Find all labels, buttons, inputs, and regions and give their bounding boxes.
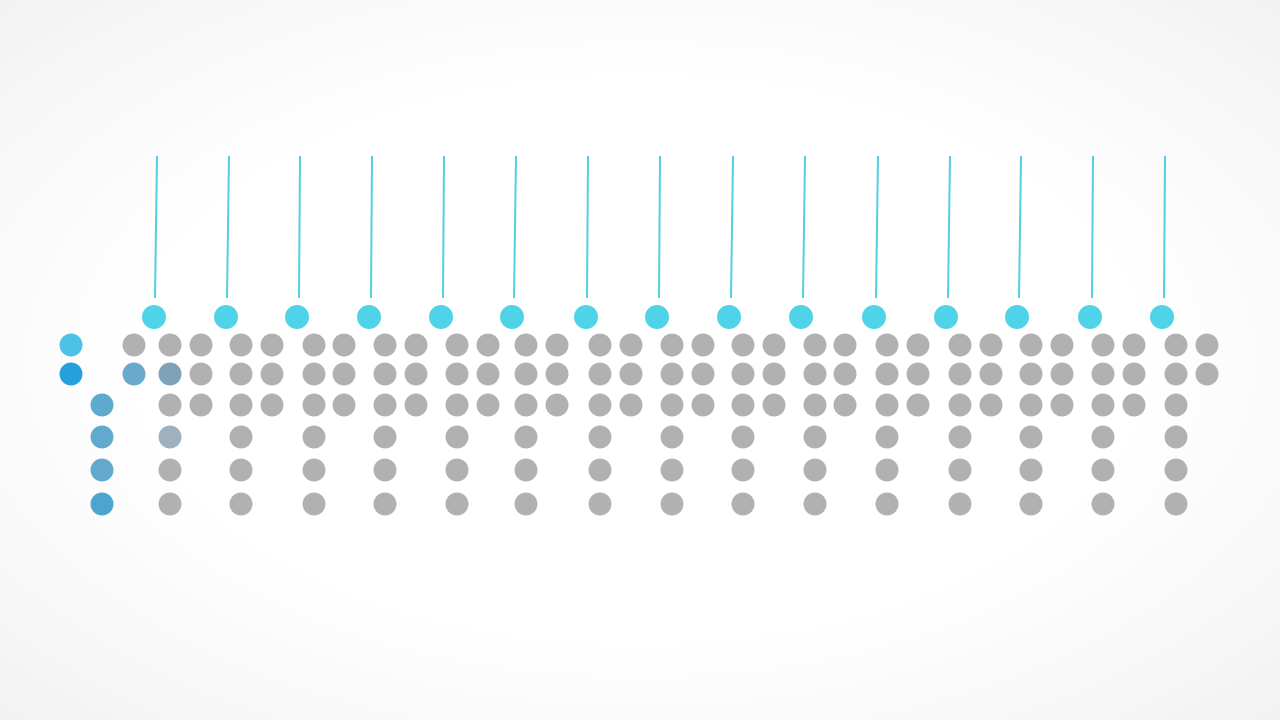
blue left dots (60, 334, 114, 516)
grey dot grid (122, 334, 1218, 516)
cyan top dots (142, 305, 1174, 329)
cyan hanging lines (155, 156, 1165, 298)
